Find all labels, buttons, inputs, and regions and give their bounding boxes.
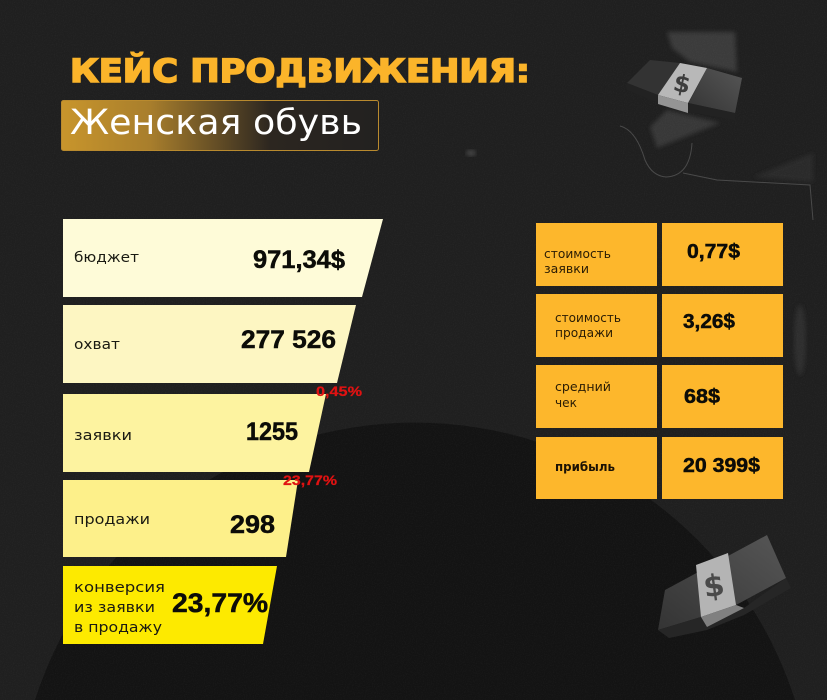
metric: sale cost: продажи: [555, 325, 613, 340]
metric: sale cost: 3,26$: [683, 311, 735, 333]
icon: money stack bottom: $: [701, 568, 727, 605]
metric: average check: 68$: [684, 386, 720, 408]
funnel row: conversion: из заявки: [74, 600, 155, 616]
funnel row: sales: [63, 480, 298, 557]
metrics table: [536, 223, 783, 499]
funnel row: conversion: в продажу: [74, 620, 162, 636]
funnel row: sales: 298: [230, 511, 275, 539]
metric: lead cost: стоимость: [544, 246, 611, 261]
funnel row: sales: продажи: [74, 512, 150, 528]
metric: sale cost: стоимость: [555, 310, 621, 325]
metric: lead cost: 0,77$: [687, 241, 740, 263]
icon: money stack top: [627, 60, 742, 120]
funnel row: leads: 1255: [246, 418, 298, 446]
funnel row: reach: [63, 305, 356, 383]
funnel row: conversion: конверсия: [74, 580, 165, 596]
metric: profit: прибыль: [555, 459, 615, 474]
funnel row: budget: 971,34$: [253, 246, 345, 274]
icon: money stack top: $: [671, 69, 693, 99]
metric: lead cost: заявки: [544, 261, 589, 276]
funnel row: conversion: [63, 566, 277, 644]
funnel: [63, 219, 383, 644]
funnel row: leads: [63, 394, 326, 472]
metric: profit: [536, 437, 783, 499]
metric: average check: средний: [555, 379, 611, 394]
icon: money stack bottom: [658, 535, 791, 638]
metric: sale cost: [536, 294, 783, 357]
funnel row: leads: заявки: [74, 428, 132, 444]
funnel row: budget: бюджет: [74, 250, 139, 266]
funnel row: conversion: 23,77%: [172, 588, 268, 618]
funnel row: budget: [63, 219, 383, 297]
metric: profit: 20 399$: [683, 455, 760, 477]
conversion label: reach to leads: 0,45%: [316, 383, 363, 399]
funnel row: reach: 277 526: [241, 326, 336, 354]
metric: average check: [536, 365, 783, 428]
funnel row: reach: охват: [74, 337, 120, 353]
metric: lead cost: [536, 223, 783, 286]
subtitle badge: Женская обувь: [70, 103, 362, 143]
title: КЕЙС ПРОДВИЖЕНИЯ:: [70, 52, 530, 90]
metric: average check: чек: [555, 395, 577, 410]
conversion label: leads to sales: 23,77%: [283, 472, 338, 488]
